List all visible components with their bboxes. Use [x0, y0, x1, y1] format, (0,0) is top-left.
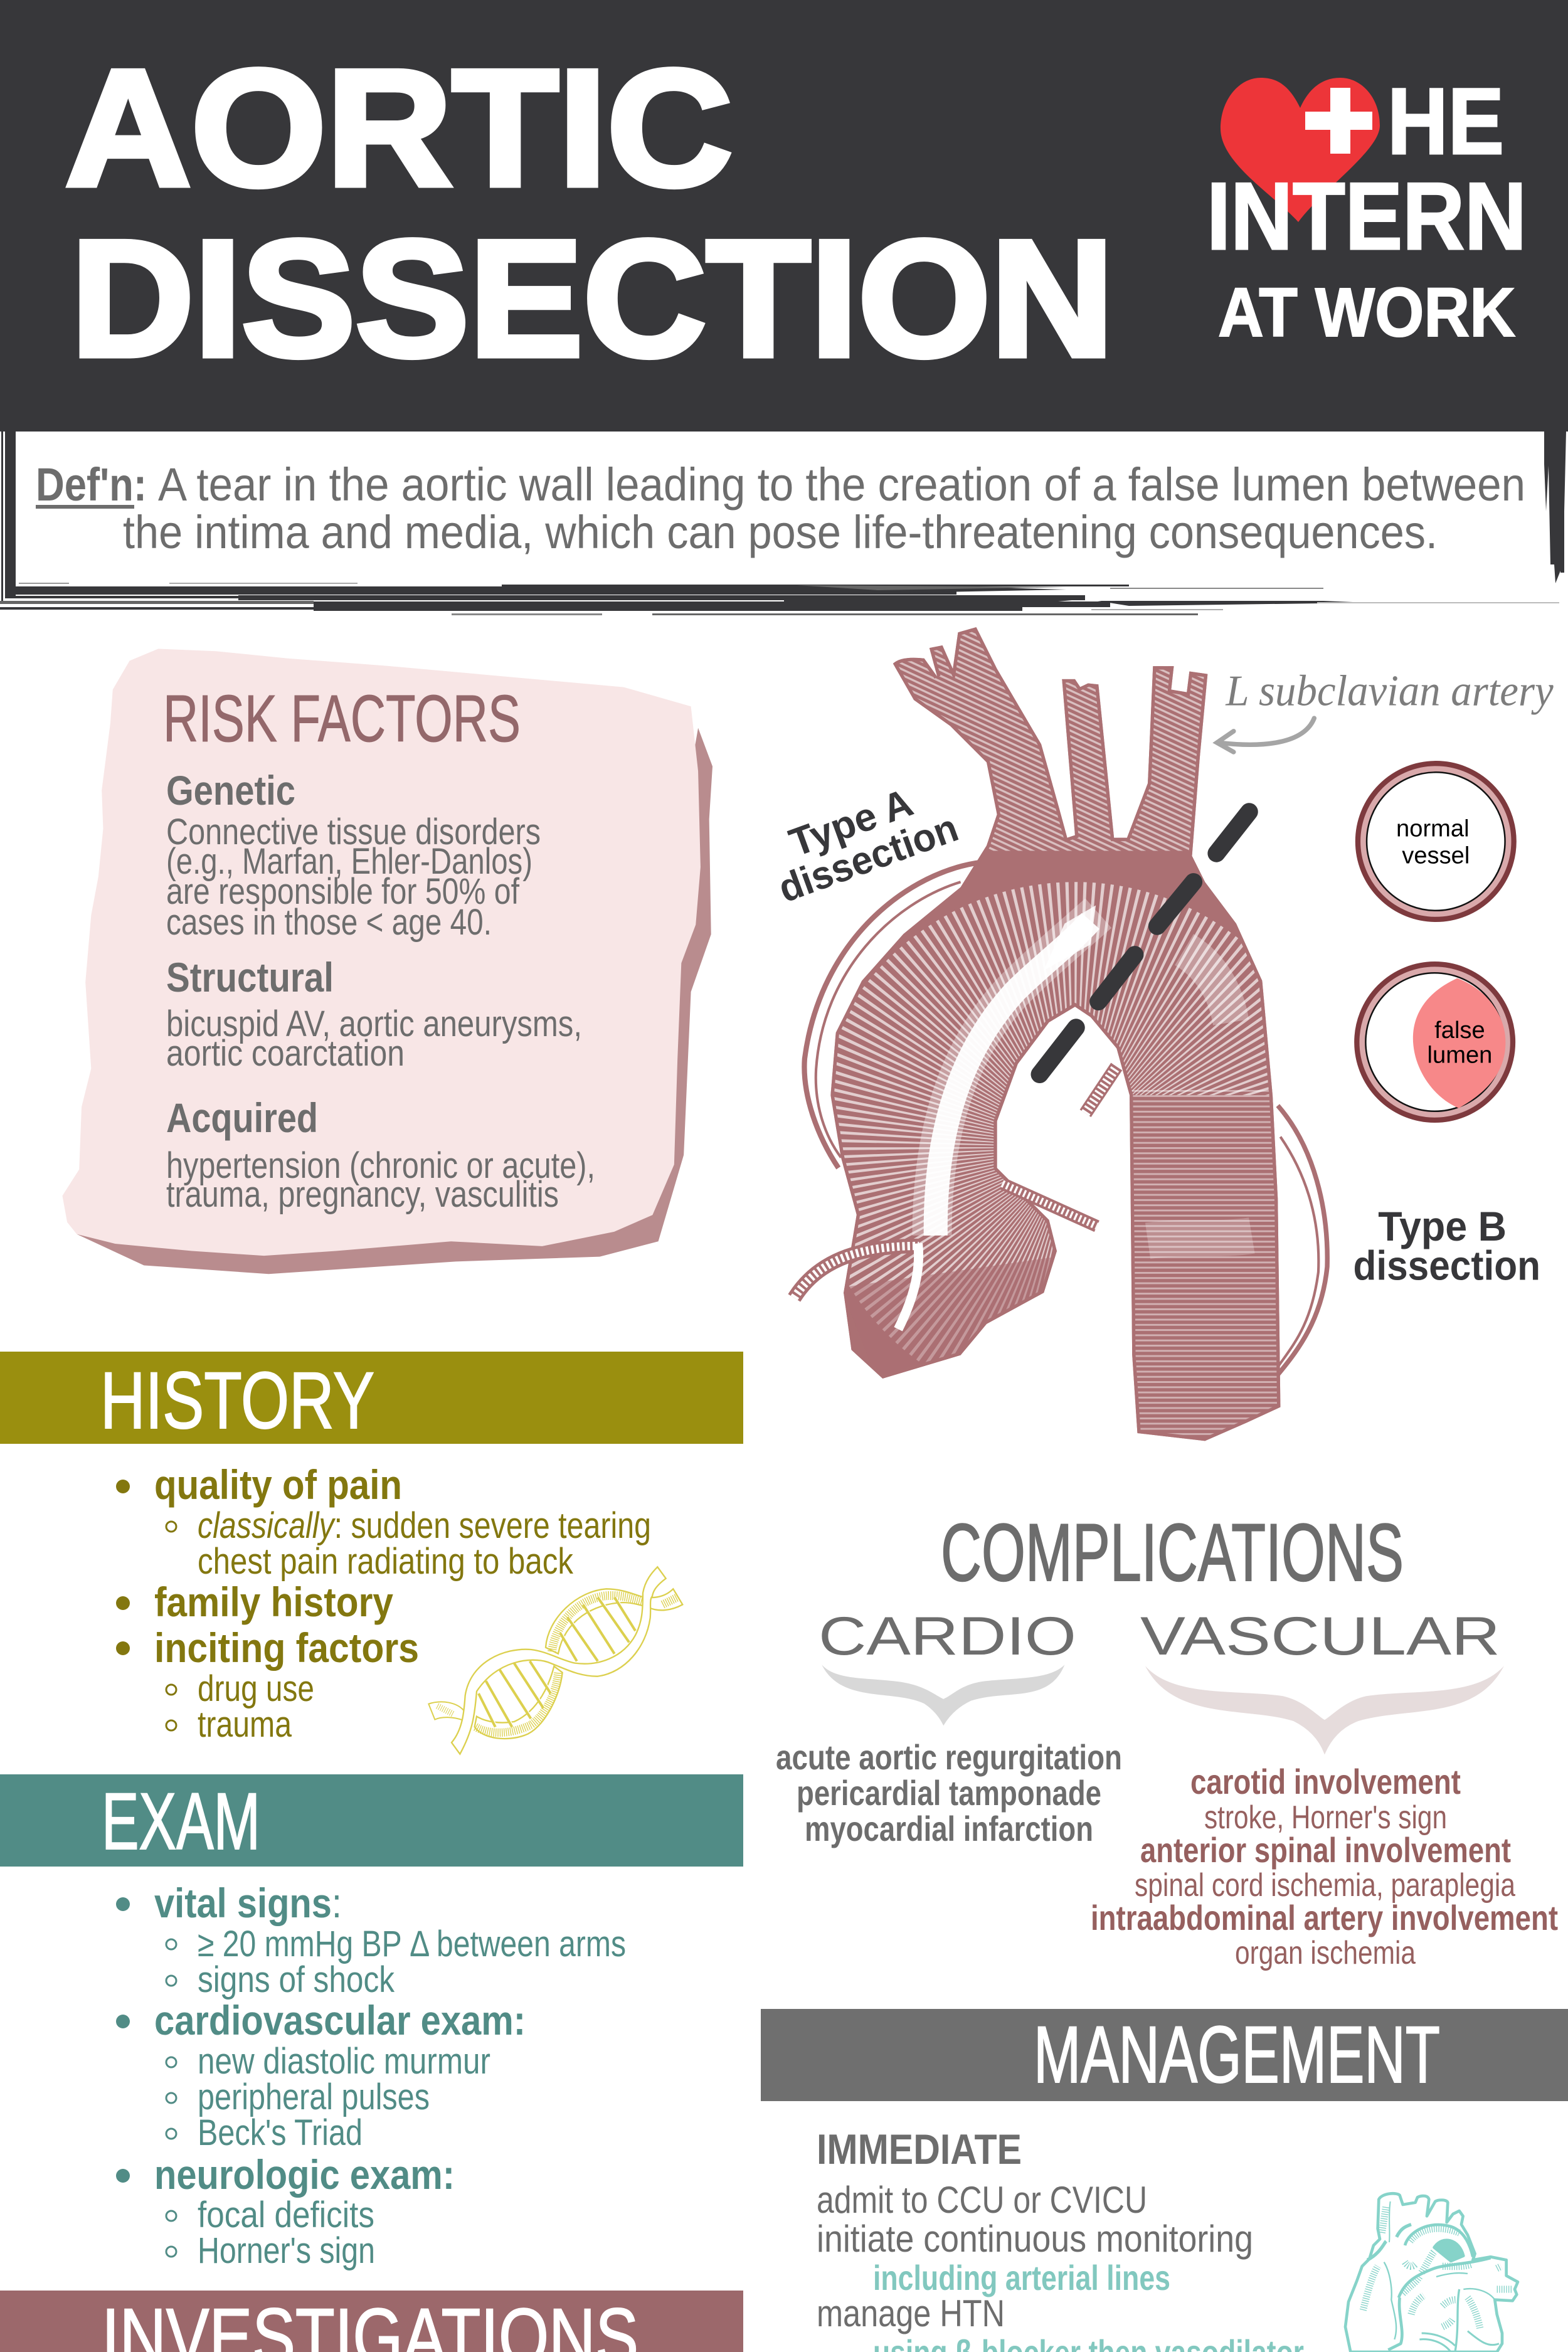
diagram: normal vessel: [1358, 763, 1514, 919]
arrow: [1217, 718, 1314, 752]
logo: The Intern at Work: HE: [1387, 68, 1504, 174]
logo: The Intern at Work: [1207, 68, 1527, 351]
vascular complications: organ ischemia: [1235, 1935, 1416, 1971]
history list: drug use: [198, 1668, 314, 1709]
history banner: HISTORY: [100, 1356, 374, 1446]
exam list: Horner's sign: [198, 2230, 375, 2271]
icon: DNA helix: [428, 1567, 682, 1754]
dissection plane dashed line: [1040, 812, 1249, 1074]
panel: complications: [776, 1507, 1558, 1971]
risk factor text: cases in those < age 40.: [166, 902, 492, 943]
risk factor text: hypertension (chronic or acute),: [166, 1145, 595, 1186]
history list: [116, 1461, 651, 1745]
panel: exam: [0, 1774, 743, 2271]
label: L subclavian artery: L subclavian artery: [1225, 667, 1554, 715]
history list: classically: sudden severe tearing: [198, 1505, 651, 1546]
history list: chest pain radiating to back: [198, 1541, 574, 1582]
diagram: normal vessel: normal: [1396, 815, 1470, 842]
risk factor text: aortic coarctation: [166, 1033, 405, 1074]
immediate list: including arterial lines: [873, 2258, 1170, 2297]
panel: history: [0, 1352, 743, 1754]
exam list: cardiovascular exam:: [154, 1997, 526, 2043]
history list: trauma: [198, 1704, 292, 1745]
exam list: new diastolic murmur: [198, 2041, 490, 2082]
header band: [0, 0, 1568, 432]
risk factor text: are responsible for 50% of: [166, 871, 520, 912]
exam list: peripheral pulses: [198, 2077, 430, 2117]
title: AORTIC: [65, 35, 733, 220]
exam list: neurologic exam:: [154, 2151, 455, 2198]
risk factor text: Acquired: [166, 1094, 318, 1141]
subheading: vascular: VASCULAR: [1140, 1606, 1500, 1666]
risk factor text: (e.g., Marfan, Ehler-Danlos): [166, 841, 532, 882]
icon: anatomical heart: [1345, 2193, 1518, 2352]
exam list: signs of shock: [198, 1959, 395, 2000]
cardio complications: acute aortic regurgitation: [776, 1737, 1122, 1777]
panel: risk factors: [62, 649, 712, 1274]
immediate list: admit to CCU or CVICU: [817, 2179, 1147, 2221]
exam list: vital signs:: [154, 1880, 342, 1926]
label: Type A dissection: dissection: [773, 806, 964, 911]
management banner: [761, 2009, 1568, 2101]
title: [65, 35, 1114, 391]
vascular complications: [1091, 1762, 1558, 1971]
diagram: false lumen: lumen: [1428, 1042, 1492, 1069]
diagram: normal vessel: vessel: [1402, 842, 1470, 869]
aorta illustration with labels: [773, 627, 1554, 1444]
exam list: Beck's Triad: [198, 2112, 363, 2153]
exam banner: [0, 1774, 743, 1867]
diagram: false lumen: [1357, 964, 1513, 1120]
exam list: focal deficits: [198, 2195, 374, 2235]
brace: vascular: [1145, 1666, 1504, 1755]
immediate list: manage HTN: [817, 2292, 1005, 2334]
immediate list: initiate continuous monitoring: [817, 2218, 1253, 2260]
paper card: [62, 649, 712, 1274]
exam banner: EXAM: [102, 1777, 260, 1867]
risk factor text: [166, 767, 595, 1215]
definition text: Def'n:: [36, 458, 147, 511]
exam list: [116, 1880, 626, 2271]
aorta drawing: [794, 627, 1327, 1444]
label: Type B dissection: Type B: [1378, 1204, 1507, 1250]
label: Type B dissection: dissection: [1353, 1242, 1540, 1289]
history list: inciting factors: [154, 1624, 419, 1671]
logo: The Intern at Work: INTERN: [1207, 163, 1527, 270]
subheading: cardio: CARDIO: [818, 1606, 1076, 1666]
panel: management: [761, 2009, 1568, 2352]
label: Type A dissection: Type A: [784, 780, 918, 866]
cardio complications: [776, 1737, 1122, 1848]
vascular complications: carotid involvement: [1190, 1762, 1461, 1801]
risk factor text: bicuspid AV, aortic aneurysms,: [166, 1004, 582, 1044]
icon: heart with cross: [1221, 78, 1380, 222]
diagram: false lumen: false: [1434, 1017, 1485, 1044]
heading: RISK FACTORS: [163, 682, 521, 756]
risk factor text: Genetic: [166, 767, 295, 813]
definition text: the intima and media, which can pose life-threatening consequences.: [123, 506, 1438, 558]
definition box: [0, 432, 1566, 615]
cardio complications: pericardial tamponade: [797, 1773, 1101, 1813]
small branches: [794, 1067, 1116, 1329]
history banner: [0, 1352, 743, 1446]
immediate heading: IMMEDIATE: [817, 2126, 1022, 2173]
cardio complications: myocardial infarction: [805, 1809, 1093, 1848]
label: Type B dissection: [1353, 1204, 1540, 1289]
risk factor text: trauma, pregnancy, vasculitis: [166, 1174, 559, 1215]
definition text: [36, 458, 1525, 558]
title: DISSECTION: [71, 206, 1114, 391]
risk factor text: Structural: [166, 954, 334, 1000]
history list: family history: [154, 1579, 393, 1625]
risk factor text: Connective tissue disorders: [166, 812, 541, 852]
immediate list: [817, 2179, 1304, 2352]
logo: The Intern at Work: AT WORK: [1218, 274, 1515, 351]
exam list: ≥ 20 mmHg BP Δ between arms: [198, 1924, 626, 1964]
vascular complications: stroke, Horner's sign: [1204, 1799, 1447, 1836]
brace: cardio: [822, 1665, 1064, 1725]
history list: quality of pain: [154, 1461, 402, 1508]
